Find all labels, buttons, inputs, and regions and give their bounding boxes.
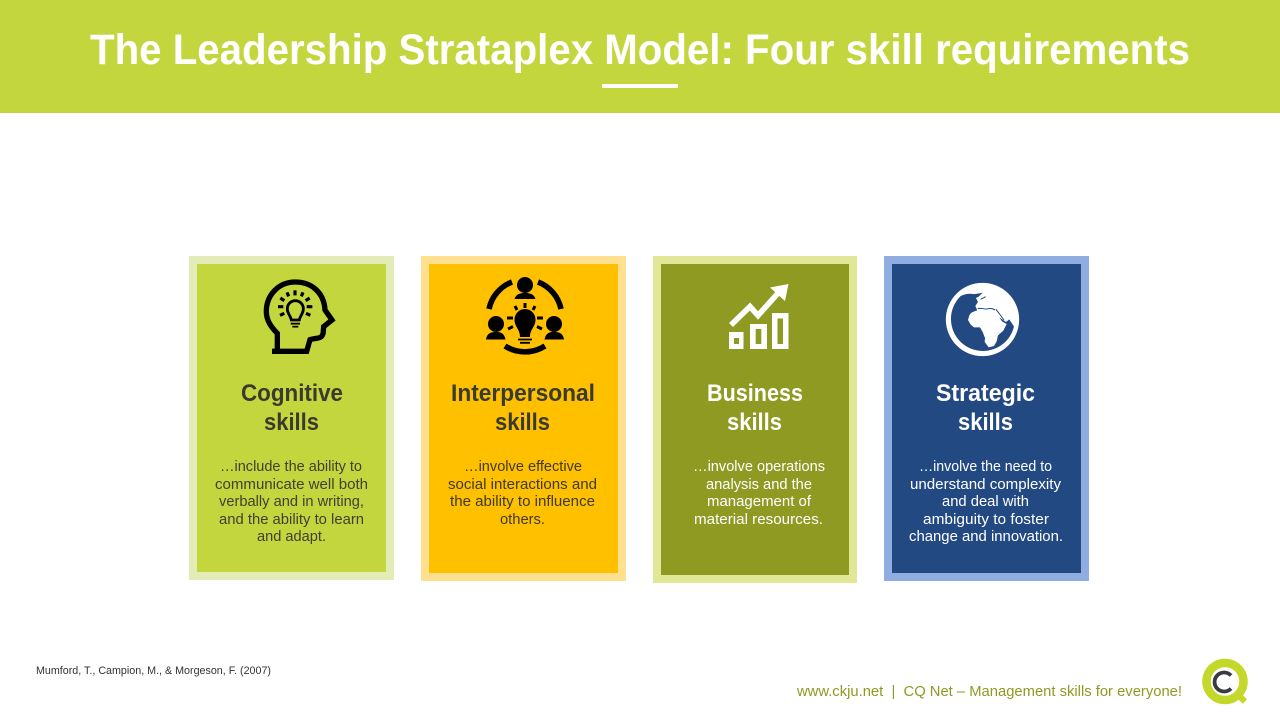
citation: Mumford, T., Campion, M., & Morgeson, F. (2007): [36, 665, 271, 677]
heading: skills: [727, 409, 782, 436]
description: communicate well both: [215, 477, 368, 493]
description: …involve effective: [464, 459, 582, 475]
description: [448, 459, 597, 528]
panel: strategic skills: [884, 256, 1089, 581]
description: …involve the need to: [919, 459, 1052, 475]
icon: rising bar chart: [729, 284, 788, 349]
heading: skills: [958, 409, 1013, 436]
icon: globe: [946, 283, 1019, 356]
description: and adapt.: [257, 529, 326, 545]
panel: cognitive skills: [189, 256, 394, 580]
description: [693, 459, 825, 528]
heading: [241, 380, 343, 436]
description: change and innovation.: [909, 529, 1063, 545]
description: material resources.: [694, 512, 823, 528]
title: The Leadership Strataplex Model: Four skill requirements: [90, 26, 1190, 74]
description: social interactions and: [448, 477, 597, 493]
heading: Business: [707, 380, 803, 407]
heading: skills: [495, 409, 550, 436]
description: management of: [707, 494, 812, 510]
icon: CQ logo: [1206, 663, 1245, 702]
heading: Strategic: [936, 380, 1035, 407]
heading: Interpersonal: [451, 380, 595, 407]
description: [215, 459, 368, 545]
icon: people around light bulb: [486, 277, 564, 352]
description: the ability to influence: [450, 494, 595, 510]
header banner: [0, 0, 1280, 113]
footer text: www.ckju.net | CQ Net – Management skills for everyone!: [796, 684, 1182, 700]
icon: head with light bulb: [266, 282, 332, 351]
heading: [707, 380, 803, 436]
description: and deal with: [942, 494, 1029, 510]
description: [909, 459, 1063, 545]
description: …involve operations: [693, 459, 825, 475]
description: verbally and in writing,: [219, 494, 364, 510]
description: …include the ability to: [220, 459, 362, 475]
description: analysis and the: [706, 477, 812, 493]
heading: skills: [264, 409, 319, 436]
description: others.: [500, 512, 545, 528]
panel: interpersonal skills: [421, 256, 626, 581]
description: and the ability to learn: [219, 512, 364, 528]
description: ambiguity to foster: [923, 512, 1049, 528]
heading: [936, 380, 1035, 436]
heading: [451, 380, 595, 436]
heading: Cognitive: [241, 380, 343, 407]
description: understand complexity: [910, 477, 1062, 493]
panel: business skills: [653, 256, 857, 583]
